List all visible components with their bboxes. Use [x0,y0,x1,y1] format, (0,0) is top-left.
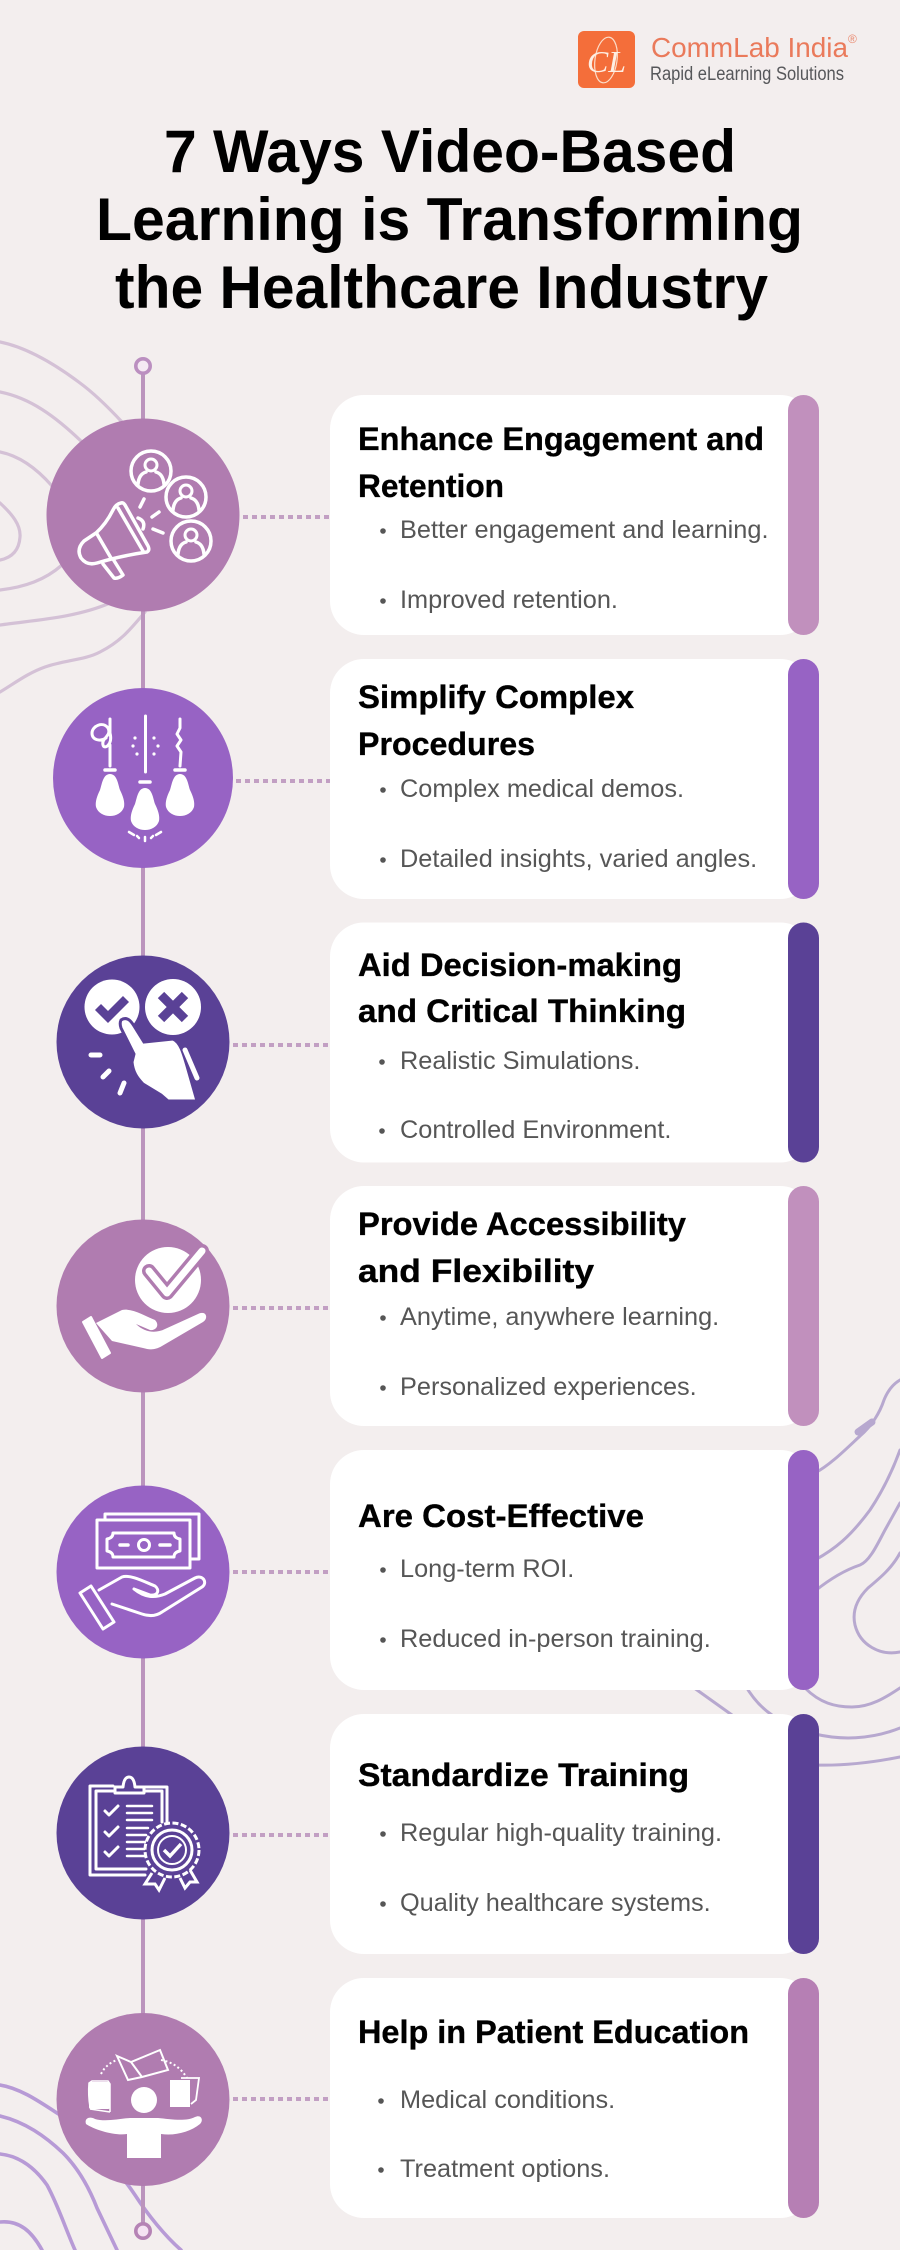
card 1: Retention [358,468,504,504]
panel: simplify complex procedures [53,659,819,899]
card 7 [330,1978,819,2218]
card 3: Aid Decision-making [358,947,682,983]
contour lines: right side [690,1380,900,1765]
icon: hand choosing check or cross [56,956,230,1128]
panel: enhance engagement and retention [46,395,819,635]
card 6: Regular high-quality training. [400,1819,722,1847]
logo: Rapid eLearning Solutions [650,64,844,85]
connector 1 [243,515,330,519]
contour lines: bottom left [0,2085,181,2250]
contour lines: top left [0,342,145,692]
panel: patient education [56,1978,819,2218]
title: 7 Ways Video-Based [164,118,736,185]
card 4: Personalized experiences. [400,1373,697,1401]
card 6 [330,1714,819,1954]
connector 2 [236,779,330,783]
panel: provide accessibility [56,1186,819,1426]
icon: hanging light bulbs [53,688,233,868]
timeline spine with end rings [136,359,150,2238]
card 3: and Critical Thinking [358,993,686,1029]
icon: megaphone and users [46,418,240,612]
panel: cost-effective [56,1450,819,1690]
connector 3 [233,1043,330,1047]
icon: hand holding banknotes [56,1486,230,1658]
card 4 [330,1186,819,1426]
card 5: Are Cost-Effective [358,1498,644,1534]
card 4: Anytime, anywhere learning. [400,1303,719,1331]
title: the Healthcare Industry [115,254,769,321]
title: Learning is Transforming [96,186,803,253]
panel: standardize training [56,1714,819,1954]
card 7: Help in Patient Education [358,2014,749,2050]
card 3: Controlled Environment. [400,1116,671,1144]
card 4: Provide Accessibility [358,1206,686,1242]
card 5: Long-term ROI. [400,1555,574,1583]
card 1: Improved retention. [400,586,618,614]
card 7: Medical conditions. [400,2086,615,2114]
card 1: Better engagement and learning. [400,516,768,544]
connector 5 [233,1570,330,1574]
title [96,118,803,321]
connector 4 [233,1306,330,1310]
card 6: Quality healthcare systems. [400,1889,711,1917]
icon: clipboard with award badge [56,1746,230,1920]
card 5 [330,1450,819,1690]
card 3 [330,922,819,1162]
logo: ® [848,32,857,46]
card 7: Treatment options. [400,2155,610,2183]
card 1 [330,395,819,635]
card 6: Standardize Training [358,1757,689,1793]
card 2 [330,659,819,899]
card 2: Complex medical demos. [400,775,684,803]
card 1: Enhance Engagement and [358,421,764,457]
connector 7 [233,2097,330,2101]
logo [578,31,857,88]
card 2: Procedures [358,726,535,762]
card 5: Reduced in-person training. [400,1625,711,1653]
panel: aid decision-making [56,922,819,1162]
icon: hand holding check mark [56,1220,230,1392]
card 4: and Flexibility [358,1253,594,1289]
card 2: Simplify Complex [358,679,634,715]
logo: CL [587,44,626,79]
card 3: Realistic Simulations. [400,1047,640,1075]
icon: person juggling books [56,2013,230,2186]
card 2: Detailed insights, varied angles. [400,845,757,873]
logo: CommLab India [651,32,848,63]
connector 6 [233,1833,330,1837]
